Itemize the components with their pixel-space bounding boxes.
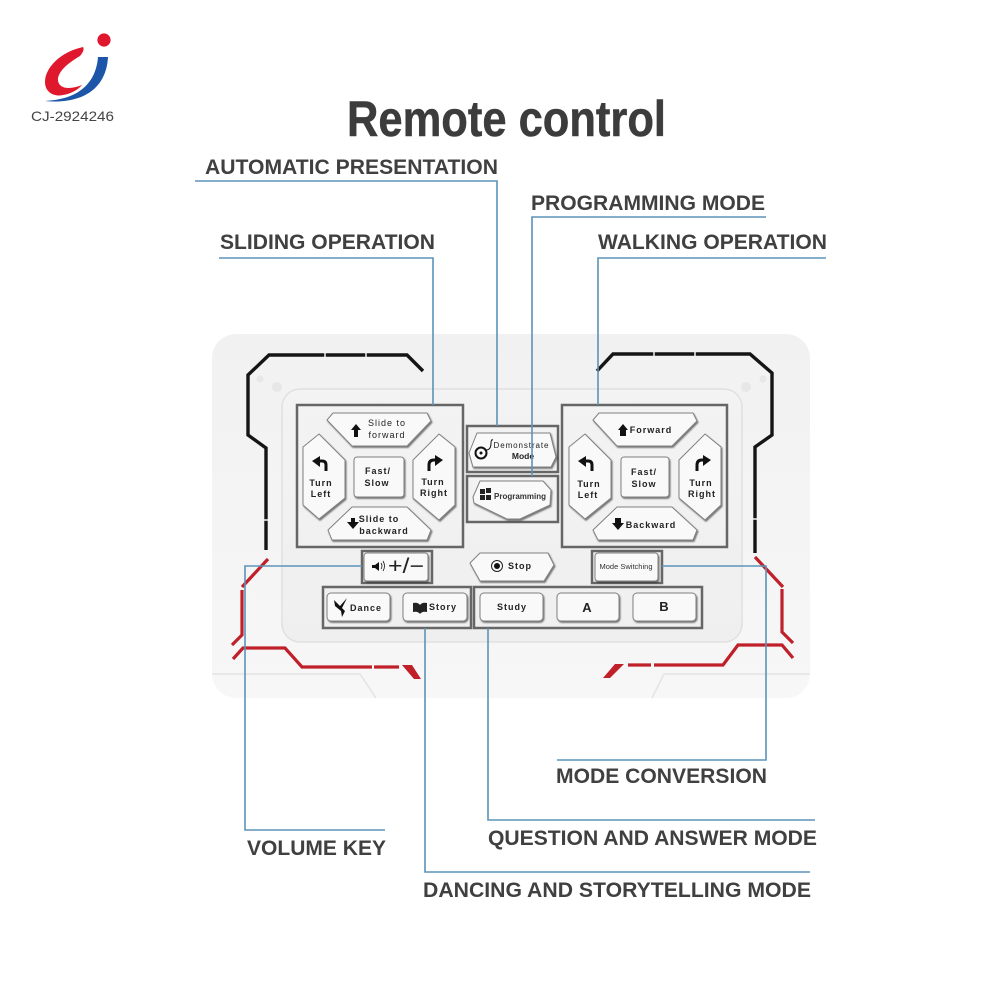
button: slide to forward: forward — [368, 430, 406, 440]
button: stop — [470, 553, 554, 581]
button: turn left — [303, 434, 345, 519]
callout: automatic presentation — [195, 156, 498, 426]
button: study: Study — [497, 602, 527, 612]
button: story: Story — [429, 602, 457, 612]
button: backward: Backward — [626, 520, 676, 530]
button: mode switching — [592, 551, 662, 583]
button: dance — [327, 593, 390, 621]
button: volume — [362, 551, 432, 583]
callout: mode conversion — [556, 566, 767, 788]
callout: question and answer mode — [488, 628, 817, 850]
button: fast slow: Fast/ — [631, 467, 657, 477]
callout: dancing and storytelling mode: DANCING AND STORYTELLING MODE — [423, 879, 811, 902]
button: mode switching: Mode Switching — [600, 562, 652, 571]
callout: sliding operation — [219, 231, 435, 405]
button: slide to backward — [328, 507, 431, 540]
button: turn left: Left — [311, 489, 331, 499]
button: fast slow: Slow — [631, 479, 657, 489]
button: turn left: Turn — [309, 478, 333, 488]
button: dance: Dance — [350, 603, 382, 613]
button: programming — [467, 476, 558, 522]
black trim left — [248, 351, 423, 550]
button: turn right: Right — [688, 489, 716, 499]
callout: question and answer mode: QUESTION AND ANSWER MODE — [488, 827, 817, 850]
group: walking controls — [562, 405, 727, 547]
panel: remote control body — [212, 334, 810, 698]
red trim left — [232, 559, 421, 679]
button: turn left: Left — [578, 490, 598, 500]
group: sliding controls — [297, 405, 463, 547]
button: A: A — [582, 600, 592, 615]
red trim right — [603, 557, 793, 678]
group: dance and story — [323, 587, 471, 628]
logo: CJ-2924246 — [31, 108, 114, 124]
callout: mode conversion: MODE CONVERSION — [556, 765, 767, 788]
button: slide to backward: backward — [359, 526, 409, 536]
callout: walking operation — [598, 231, 827, 405]
callout: programming mode — [531, 192, 766, 476]
button: demonstrate mode: Demonstrate — [494, 441, 549, 450]
button: forward — [593, 413, 697, 446]
button: fast slow: Fast/ — [365, 466, 391, 476]
button: turn right: Turn — [689, 478, 713, 488]
button: B — [633, 593, 696, 621]
button: fast slow — [621, 457, 669, 497]
button: study — [480, 593, 543, 621]
black trim right — [597, 350, 772, 553]
callout: volume key: VOLUME KEY — [247, 837, 386, 860]
callout: automatic presentation: AUTOMATIC PRESENTATION — [205, 156, 498, 179]
button: stop: Stop — [508, 561, 532, 571]
logo — [31, 33, 114, 124]
button: backward — [593, 507, 697, 540]
group: study, A, B — [474, 587, 702, 628]
button: turn left: Turn — [577, 479, 601, 489]
button: slide to forward: Slide to — [368, 418, 406, 428]
button: forward: Forward — [630, 425, 672, 435]
button: turn right — [679, 434, 721, 520]
button: programming: Programming — [494, 492, 546, 501]
button: slide to backward: Slide to — [359, 514, 399, 524]
callout: programming mode: PROGRAMMING MODE — [531, 192, 765, 215]
callout: dancing and storytelling mode — [423, 628, 811, 902]
button: B: B — [659, 599, 669, 614]
callout: walking operation: WALKING OPERATION — [598, 231, 827, 254]
button: fast slow — [354, 457, 404, 497]
callout: sliding operation: SLIDING OPERATION — [220, 231, 435, 254]
button: turn right: Turn — [421, 477, 445, 487]
button: demonstrate mode — [467, 426, 558, 472]
button: story — [403, 593, 467, 621]
button: turn right — [413, 434, 455, 520]
button: demonstrate mode: Mode — [512, 451, 534, 461]
button: fast slow: Slow — [364, 478, 390, 488]
callout: volume key — [245, 566, 386, 860]
button: volume: +/− — [388, 555, 424, 578]
title: Remote control — [347, 91, 666, 147]
button: turn left — [569, 434, 611, 519]
button: turn right: Right — [420, 488, 448, 498]
button: slide to forward — [327, 413, 431, 446]
button: A — [557, 593, 619, 621]
